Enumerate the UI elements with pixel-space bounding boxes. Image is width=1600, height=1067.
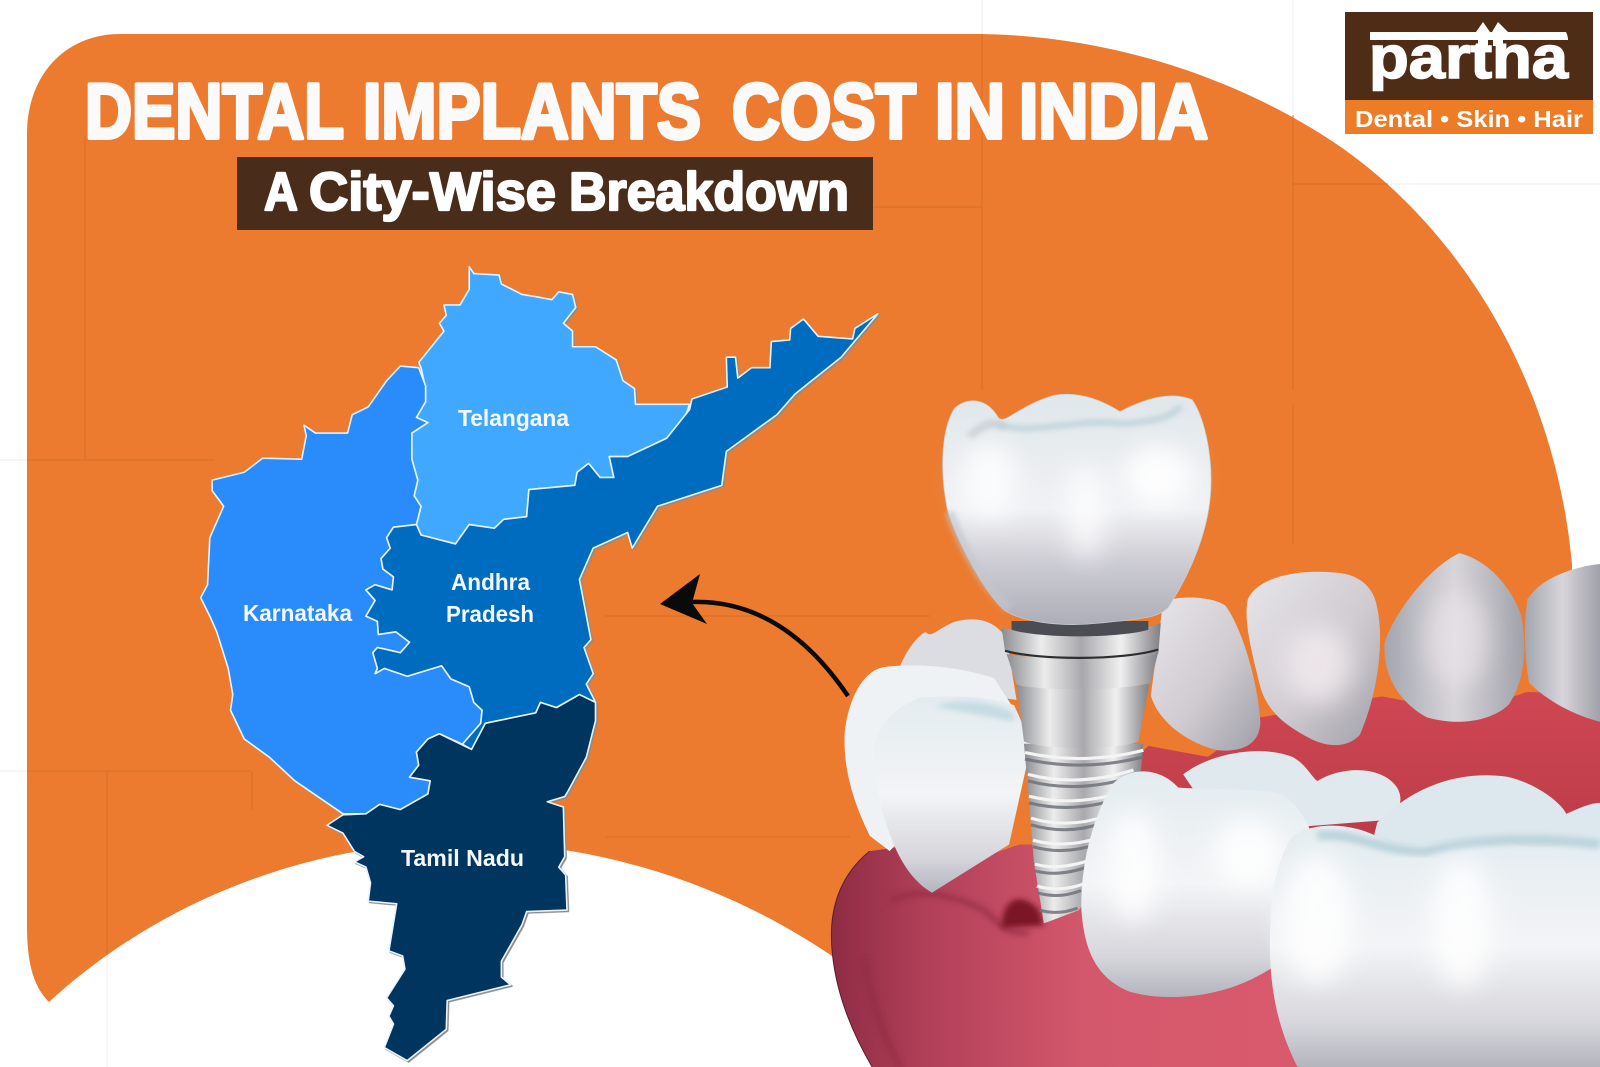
state: Tamil Nadu [327, 695, 595, 1061]
state labels: Tamil Nadu [401, 845, 524, 871]
state labels: Karnataka [243, 600, 352, 626]
state labels: Telangana [458, 405, 569, 431]
subtitle banner [237, 157, 873, 230]
implant abutment and screw [1002, 621, 1161, 923]
gums [831, 692, 1600, 1067]
back teeth row [900, 553, 1600, 751]
map: south India states [201, 267, 878, 1061]
front molars [1081, 751, 1600, 1067]
title: IMPLANTS [363, 67, 701, 155]
logo: partha: partha [1369, 24, 1569, 91]
implant crown [943, 394, 1211, 625]
subtitle banner: City-Wise [309, 162, 556, 222]
logo: partha [1345, 12, 1593, 134]
title: INDIA [1019, 67, 1208, 155]
title: IN [935, 67, 1005, 155]
state: Telangana [412, 267, 690, 544]
left molars [844, 665, 1031, 893]
logo: partha: Dental • Skin • Hair [1355, 106, 1583, 132]
state labels [243, 405, 569, 871]
title: COST [732, 67, 916, 155]
state labels: Andhra [451, 569, 530, 595]
title: DENTAL [85, 67, 344, 155]
state: Andhra Pradesh [366, 314, 878, 749]
arrow: implant to map [660, 574, 848, 696]
title [85, 67, 1208, 155]
state labels: Pradesh [446, 601, 534, 627]
subtitle banner: A [264, 162, 298, 222]
illustration: dental implant and teeth [831, 394, 1600, 1067]
subtitle banner: Breakdown [569, 162, 849, 222]
state: Karnataka [201, 366, 482, 814]
